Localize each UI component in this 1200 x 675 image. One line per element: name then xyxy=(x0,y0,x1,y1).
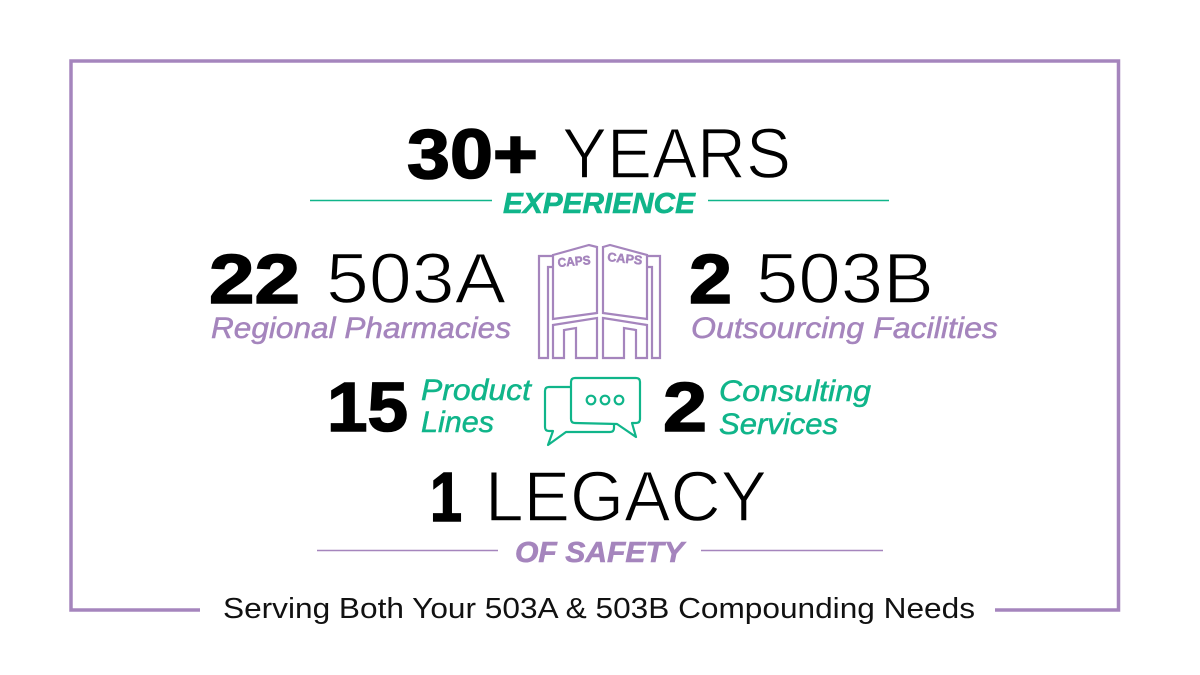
subheading: experience: EXPERIENCE xyxy=(503,188,697,220)
icon: CAPS building: CAPS xyxy=(557,253,591,270)
stat: 22 503A regional pharmacies: 503A xyxy=(326,240,507,319)
heading: 30+ years: 30+ xyxy=(407,115,538,193)
frame border xyxy=(71,61,1118,610)
footer tagline: Serving Both Your 503A & 503B Compounding Needs xyxy=(223,593,975,625)
stat: 15 product lines: Lines xyxy=(421,406,494,439)
stat: 2 consulting services xyxy=(663,368,871,446)
stat: 22 503A regional pharmacies: Regional Pharmacies xyxy=(211,312,511,345)
stat: 2 503B outsourcing facilities: 503B xyxy=(756,240,934,319)
stat: 22 503A regional pharmacies xyxy=(209,240,511,345)
heading: 30+ years: YEARS xyxy=(562,115,791,194)
stat: 15 product lines: 15 xyxy=(327,368,408,446)
stat: 2 consulting services: 2 xyxy=(663,368,707,446)
stat: 15 product lines xyxy=(327,368,533,446)
stat: 2 503B outsourcing facilities: 2 xyxy=(689,240,732,318)
heading: 1 legacy: LEGACY xyxy=(485,458,767,537)
icon: chat bubbles xyxy=(545,378,640,445)
icon: CAPS building xyxy=(539,245,660,358)
stat: 2 503B outsourcing facilities xyxy=(689,240,998,345)
stat: 22 503A regional pharmacies: 22 xyxy=(209,240,300,318)
stat: 2 503B outsourcing facilities: Outsourcing Facilities xyxy=(691,312,998,345)
icon: CAPS building: CAPS xyxy=(607,250,643,268)
subheading: of safety: OF SAFETY xyxy=(515,537,687,569)
heading: 30+ years xyxy=(407,115,791,194)
stat: 2 consulting services: Services xyxy=(719,408,838,441)
stat: 15 product lines: Product xyxy=(421,374,533,407)
stat: 2 consulting services: Consulting xyxy=(719,375,871,408)
heading: 1 legacy: 1 xyxy=(430,458,462,536)
